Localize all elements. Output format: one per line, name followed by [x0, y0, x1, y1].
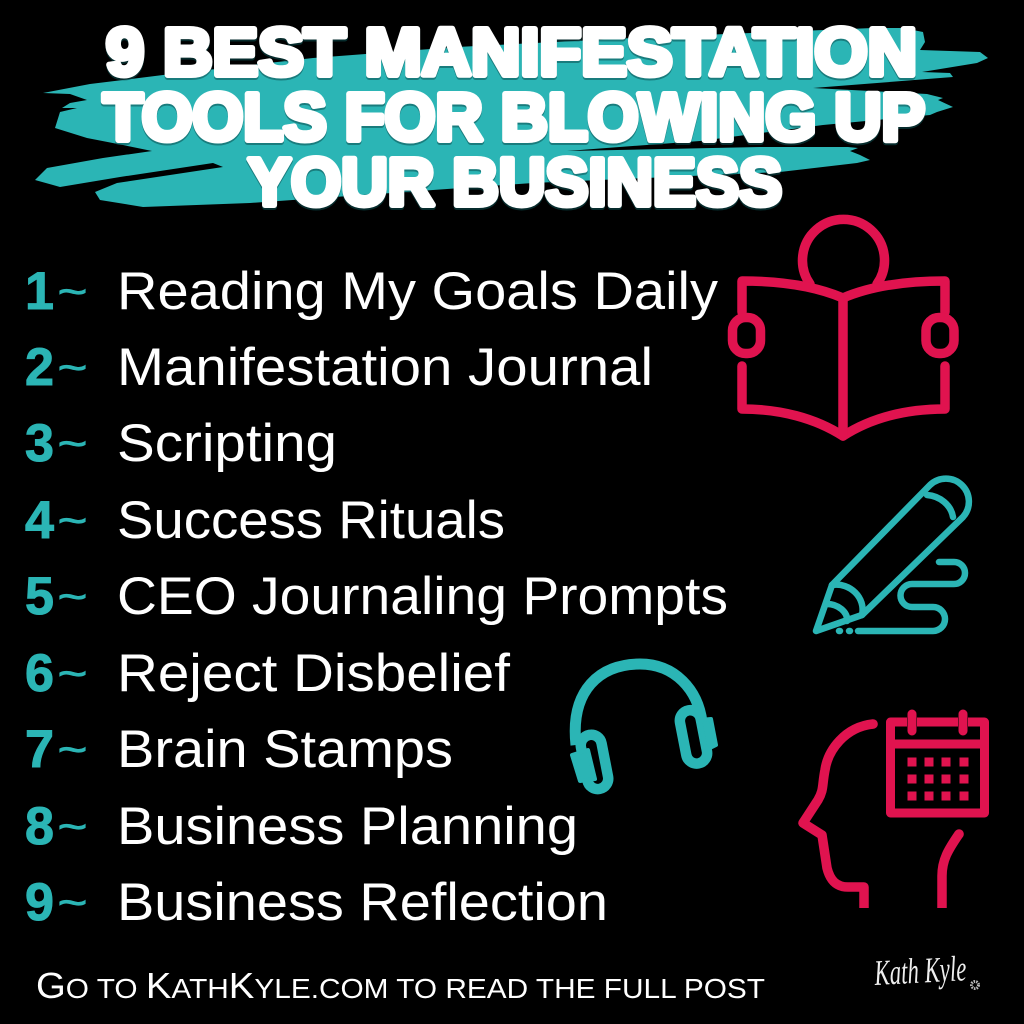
- icon: person reading book: [732, 219, 954, 436]
- item 3: Scripting: [117, 414, 337, 473]
- item 1: ~: [58, 271, 87, 312]
- title: YOUR BUSINESS: [248, 145, 782, 220]
- item 9: ~: [58, 882, 87, 923]
- item 1: Reading My Goals Daily: [117, 262, 719, 321]
- item 6: 6: [25, 644, 54, 703]
- title: TOOLS FOR BLOWING UP: [103, 82, 925, 157]
- item 4: ~: [58, 500, 87, 541]
- item 5: CEO Journaling Prompts: [117, 567, 728, 626]
- item 7: Brain Stamps: [117, 720, 453, 779]
- title: YOUR BUSINESS: [248, 147, 782, 222]
- signature logo: [873, 948, 978, 993]
- item 9: Business Reflection: [117, 873, 608, 932]
- item 2: ~: [58, 347, 87, 388]
- item 7: ~: [58, 729, 87, 770]
- footer call to action: GO TO KATHKYLE.COM TO READ THE FULL POST: [36, 965, 765, 1006]
- title: 9 BEST MANIFESTATION: [106, 17, 917, 92]
- item 8: Business Planning: [117, 797, 578, 856]
- head outline: [803, 724, 959, 908]
- item 8: 8: [25, 797, 54, 856]
- title: 9 BEST MANIFESTATION: [106, 15, 917, 90]
- teal brush stroke behind title: [35, 28, 988, 207]
- item 6: ~: [58, 653, 87, 694]
- icon: pencil writing: [816, 479, 969, 631]
- list of nine tools: [25, 262, 728, 932]
- item 3: 3: [25, 414, 54, 473]
- item 7: 7: [25, 720, 54, 779]
- calendar: [890, 714, 985, 813]
- title: [103, 15, 925, 222]
- item 4: Success Rituals: [117, 491, 505, 550]
- icon: head with calendar: [803, 714, 985, 908]
- item 2: Manifestation Journal: [117, 338, 653, 397]
- item 9: 9: [25, 873, 54, 932]
- item 5: 5: [25, 567, 54, 626]
- title: TOOLS FOR BLOWING UP: [103, 80, 925, 155]
- item 3: [25, 414, 337, 473]
- item 2: 2: [25, 338, 54, 397]
- item 8: ~: [58, 806, 87, 847]
- signature logo: Kath Kyle: [873, 948, 967, 993]
- item 4: 4: [25, 491, 55, 550]
- item 3: ~: [58, 423, 87, 464]
- icon: headphones: [572, 664, 716, 791]
- item 6: Reject Disbelief: [117, 644, 510, 703]
- item 1: 1: [25, 262, 54, 321]
- item 5: ~: [58, 576, 87, 617]
